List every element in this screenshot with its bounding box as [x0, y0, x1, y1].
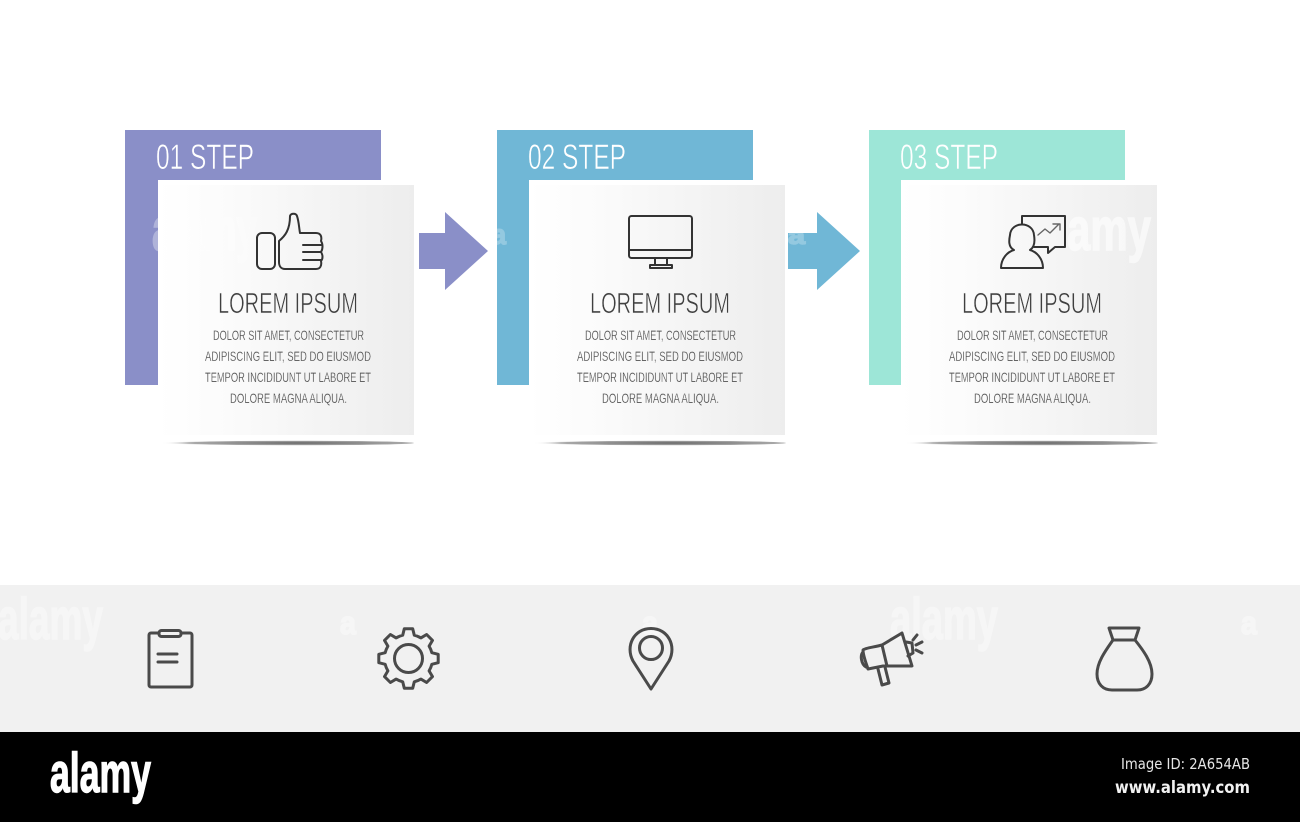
- step 2 description: TEMPOR INCIDIDUNT UT LABORE ET: [577, 369, 743, 385]
- icon: gear: [379, 629, 438, 688]
- step 3 description: [949, 327, 1115, 406]
- footer bar: [0, 732, 1300, 822]
- step 1 description: ADIPISCING ELIT, SED DO EIUSMOD: [205, 348, 371, 364]
- strip watermarks: a: [642, 605, 658, 641]
- panel: step 3: [869, 130, 1158, 445]
- step 2 label: 02 STEP: [528, 138, 626, 177]
- step 3 card: [901, 185, 1157, 435]
- strip background: [0, 585, 1300, 732]
- icon: sack: [1097, 628, 1152, 690]
- step 3 label: 03 STEP: [900, 138, 998, 177]
- step 3 description: DOLORE MAGNA ALIQUA.: [974, 390, 1091, 406]
- step 1 description: [205, 327, 371, 406]
- alamy logo: alamy: [50, 741, 151, 804]
- step 2 description: DOLOR SIT AMET, CONSECTETUR: [585, 327, 736, 343]
- watermark on step 3 card: amy: [1067, 196, 1151, 263]
- step 2 card shadow: [532, 441, 786, 445]
- arrow: step 2 to step 3: [788, 212, 860, 290]
- step 2 card: [529, 185, 785, 435]
- watermarks over the steps: a: [788, 223, 806, 250]
- step 1 coloured L-shaped backing: [125, 130, 381, 385]
- step 1 label: 01 STEP: [156, 138, 254, 177]
- icon: thumbs up: [257, 214, 322, 269]
- icon: presenter with chart bubble: [1001, 216, 1065, 268]
- step 3 heading: LOREM IPSUM: [962, 288, 1102, 320]
- strip watermarks: alamy: [0, 587, 103, 652]
- website: www.alamy.com: [1115, 778, 1250, 798]
- arrow: step 1 to step 2: [419, 212, 488, 290]
- step 3 coloured L-shaped backing: [869, 130, 1125, 385]
- step 1 card: [158, 185, 414, 435]
- icon: clipboard: [149, 630, 192, 687]
- strip watermarks: a: [340, 605, 356, 641]
- footer background: [0, 732, 1300, 822]
- strip watermarks: alamy: [890, 587, 998, 652]
- step 3 description: TEMPOR INCIDIDUNT UT LABORE ET: [949, 369, 1115, 385]
- step 2 description: DOLORE MAGNA ALIQUA.: [602, 390, 719, 406]
- image id: Image ID: 2A654AB: [1121, 755, 1250, 773]
- step 3 description: ADIPISCING ELIT, SED DO EIUSMOD: [949, 348, 1115, 364]
- step 2 coloured L-shaped backing: [497, 130, 753, 385]
- step 2 heading: LOREM IPSUM: [590, 288, 730, 320]
- panel: step 1: [125, 130, 414, 445]
- watermarks over the steps: [152, 196, 806, 263]
- step 1 description: TEMPOR INCIDIDUNT UT LABORE ET: [205, 369, 371, 385]
- step 3 card shadow: [904, 441, 1158, 445]
- step 3 description: DOLOR SIT AMET, CONSECTETUR: [957, 327, 1108, 343]
- step 2 description: [577, 327, 743, 406]
- bottom icon strip: [0, 585, 1300, 732]
- strip watermarks: [0, 587, 1257, 652]
- icon: map pin: [630, 628, 672, 689]
- icon: monitor: [629, 216, 692, 268]
- watermarks over the steps: alamy: [152, 196, 257, 263]
- strip watermarks: a: [1241, 605, 1257, 641]
- panel: step 2: [497, 130, 786, 445]
- step 1 description: DOLORE MAGNA ALIQUA.: [230, 390, 347, 406]
- step 1 heading: LOREM IPSUM: [218, 288, 358, 320]
- step 1 description: DOLOR SIT AMET, CONSECTETUR: [213, 327, 364, 343]
- icon: megaphone: [861, 633, 922, 685]
- step 1 card shadow: [160, 441, 414, 445]
- watermarks over the steps: a: [492, 219, 506, 250]
- step 2 description: ADIPISCING ELIT, SED DO EIUSMOD: [577, 348, 743, 364]
